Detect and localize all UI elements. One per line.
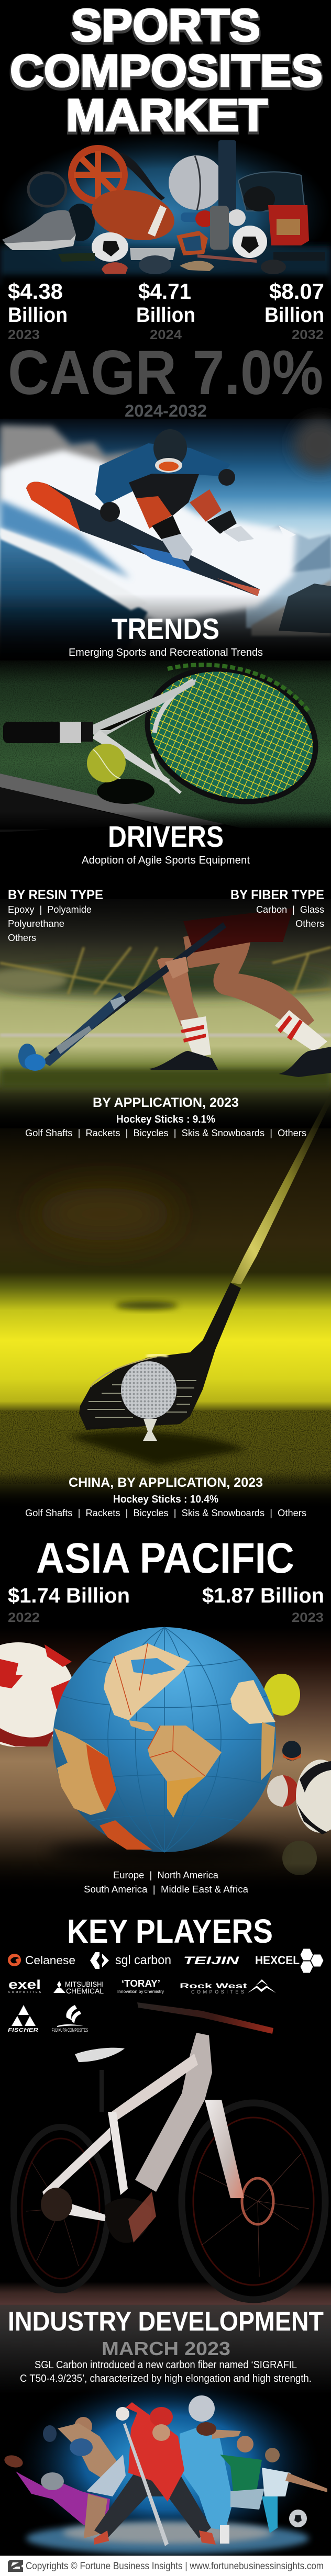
logo: Mitsubishi Chemical (53, 1980, 104, 1995)
stat: 2022: $1.74 Billion (8, 1584, 130, 1607)
stat: 2023: $4.38 (8, 279, 63, 304)
front wheel (182, 2103, 325, 2300)
panel: china by application (25, 1475, 306, 1518)
stat: 2024: 2024 (150, 328, 182, 342)
snowboard (26, 481, 260, 596)
logo: Toray: ‘TORAY’ (122, 1978, 160, 1989)
soccer players (220, 2436, 327, 2533)
stat: 2022 (8, 1584, 130, 1625)
title: MARKET (66, 90, 268, 141)
segment: fiber type (230, 888, 324, 929)
text: development description: SGL Carbon introduced a new carbon fiber named ‘SIGRAFIL (35, 2359, 297, 2371)
text: china hockey sticks share: Hockey Sticks : 10.4% (113, 1494, 218, 1505)
logo: Mitsubishi Chemical: MITSUBISHI (65, 1980, 104, 1988)
stat: 2032 (264, 279, 324, 342)
date: MARCH 2023 (102, 2338, 230, 2359)
text: other regions (84, 1870, 249, 1895)
logo: Fischer (8, 2005, 39, 2033)
illustration: snowboarder (0, 419, 331, 660)
ground (0, 2282, 331, 2313)
stat: 2023 (8, 279, 68, 342)
heading: asia pacific: ASIA PACIFIC (36, 1535, 294, 1582)
panel: golf photo (0, 1091, 331, 1507)
illustration: athletes (3, 2376, 327, 2554)
stat: 2032: 2032 (292, 328, 324, 342)
illustration: globe and balls (0, 1627, 331, 1895)
logo: sgl carbon: sgl carbon (115, 1953, 171, 1967)
heading: trends: TRENDS (112, 612, 219, 646)
illustration: field hockey (0, 899, 331, 1128)
panel: asia pacific (0, 1535, 331, 1895)
logo: Toray (117, 1978, 164, 1994)
text: other applications: Golf Shafts | Rackets | Bicycles | Skis & Snowboards | Others (25, 1128, 306, 1138)
stat: 2024: Billion (136, 304, 195, 327)
stat: 2032: Billion (264, 304, 324, 327)
title (10, 0, 323, 141)
illustration: tennis racket (0, 648, 331, 837)
logo: Fischer: FISCHER (8, 2028, 39, 2033)
logo: Mitsubishi Chemical: CHEMICAL (66, 1987, 104, 1995)
segment: resin type: BY RESIN TYPE (8, 888, 103, 902)
stat: 2023 (202, 1584, 324, 1625)
heading: key players: KEY PLAYERS (67, 1912, 273, 1950)
icon: Fortune Business Insights logo (8, 2560, 23, 2572)
stat: 2023: $1.87 Billion (202, 1584, 324, 1607)
stat: 2022: 2022 (8, 1610, 40, 1625)
logo: Exel Composites (8, 1978, 41, 1994)
segment: fiber type: Carbon | Glass (256, 904, 324, 915)
logo: Teijin: TEIJIN (183, 1955, 239, 1967)
panel: key players (8, 1912, 324, 2033)
panel: trends (0, 419, 331, 660)
panel: drivers (0, 648, 331, 866)
logo: Fujikura Composites (52, 2005, 88, 2033)
panel: hockey photo and segmentation (0, 888, 331, 1128)
logo: Rock West Composites: Rock West (180, 1981, 248, 1990)
heading: drivers: DRIVERS (108, 820, 224, 854)
illustration: golf club (68, 1091, 331, 1465)
title: COMPOSITES (10, 46, 323, 96)
CAGR period: 2024-2032 (125, 401, 207, 420)
rider (95, 429, 254, 561)
segment: fiber type: BY FIBER TYPE (230, 888, 324, 902)
text: development description (20, 2359, 312, 2384)
text: other regions: South America | Middle East & Africa (84, 1884, 249, 1895)
logo: Celanese: Celanese (25, 1954, 75, 1967)
segment: resin type (8, 888, 103, 943)
footer (0, 2556, 331, 2576)
stat: 2024 (136, 279, 195, 342)
logo: Exel Composites: exel (8, 1978, 41, 1992)
heading: china by application: CHINA, BY APPLICATION, 2023 (69, 1475, 263, 1490)
golf ball (121, 1361, 176, 1441)
logo: Toray: Innovation by Chemistry (117, 1989, 164, 1994)
stat: 2023: 2023 (292, 1610, 324, 1625)
heading: by application: BY APPLICATION, 2023 (93, 1095, 239, 1110)
text: china other applications: Golf Shafts | Rackets | Bicycles | Skis & Snowboards | Others (25, 1508, 306, 1518)
segment: resin type: Polyurethane (8, 919, 64, 929)
quarterback (180, 2395, 241, 2544)
segment: resin type: Epoxy | Polyamide (8, 904, 92, 915)
frame (41, 2033, 244, 2243)
segment: resin type: Others (8, 933, 36, 943)
rear wheel (14, 2127, 108, 2290)
logo: Exel Composites: COMPOSITES (8, 1991, 41, 1994)
boxer (43, 2417, 126, 2538)
logo: Hexcel (255, 1948, 324, 1973)
stat: 2023: Billion (8, 304, 68, 327)
text: development description: C T50-4.9/235’, characterized by high elongation and high strength. (20, 2373, 312, 2384)
text: other regions: Europe | North America (113, 1870, 219, 1880)
stat: 2024: $4.71 (138, 279, 191, 304)
background band (0, 2305, 331, 2394)
panel: bicycle illustration (0, 2002, 331, 2313)
logo: Hexcel: HEXCEL (255, 1954, 300, 1967)
logo: Rock West Composites (180, 1979, 276, 1995)
text: hockey sticks share: Hockey Sticks : 9.1% (116, 1114, 215, 1125)
segment: fiber type: Others (295, 919, 324, 929)
stat: 2032: $8.07 (269, 279, 324, 304)
panel: industry development (0, 2305, 331, 2394)
panel: by application (25, 1095, 306, 1138)
logo: Fujikura Composites: FUJIKURA COMPOSITES (52, 2028, 88, 2033)
globe (53, 1627, 276, 1852)
title: SPORTS (71, 0, 260, 51)
hockey player (94, 2402, 216, 2546)
text: drivers description: Adoption of Agile Sports Equipment (82, 855, 250, 866)
football player diving (3, 2454, 110, 2525)
logo: sgl carbon (90, 1952, 171, 1969)
illustration: sports equipment (0, 133, 331, 293)
stat: 2023: 2023 (8, 328, 40, 342)
text: trends description: Emerging Sports and Recreational Trends (69, 647, 263, 658)
panel: market size stats (8, 279, 324, 420)
logo: Rock West Composites: COMPOSITES (191, 1989, 244, 1995)
handlebar (137, 2002, 273, 2034)
panel: header (0, 0, 331, 293)
